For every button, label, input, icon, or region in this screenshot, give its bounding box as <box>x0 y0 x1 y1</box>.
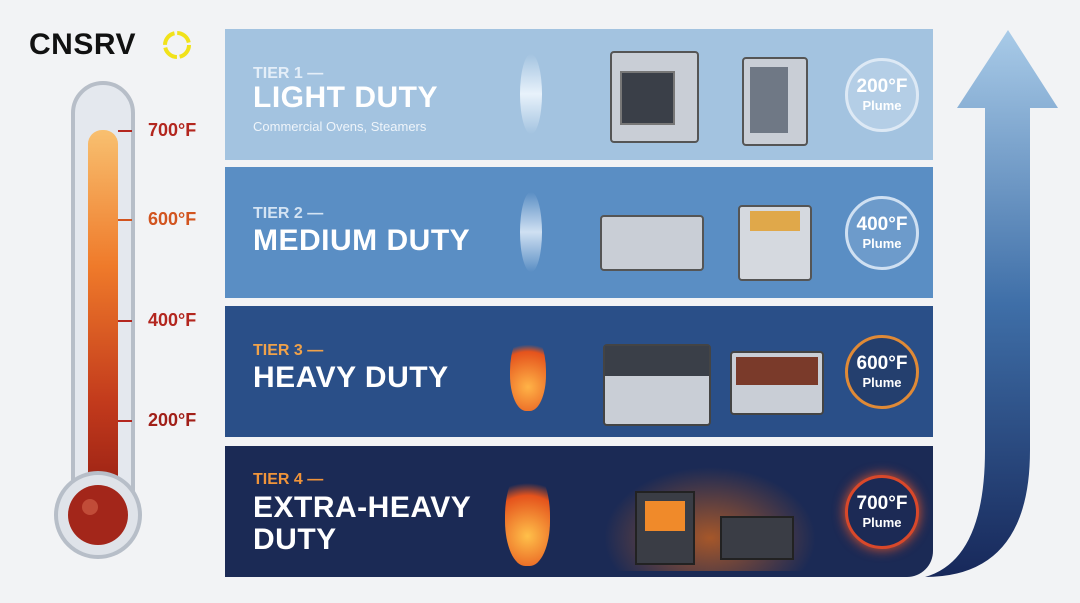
scale labels: 400°F <box>148 310 196 330</box>
badge: 400F: Plume <box>862 236 902 251</box>
thermometer <box>54 81 142 559</box>
panel: tier 4: EXTRA-HEAVY <box>253 491 471 524</box>
panel: tier 3: HEAVY DUTY <box>253 361 449 394</box>
badge: 200F: Plume <box>862 98 902 113</box>
panel: tier 1: LIGHT DUTY <box>253 81 438 114</box>
scale labels: 200°F <box>148 410 196 430</box>
badge: 400F: 400°F <box>857 214 907 235</box>
icon: combi steamer <box>742 57 808 146</box>
badge: 600F <box>845 335 919 409</box>
icon: range <box>603 344 711 426</box>
arrow <box>925 30 1058 577</box>
badge: 600F: Plume <box>862 375 902 390</box>
icon: logo ring <box>163 31 191 59</box>
panel: tier 1: Commercial Ovens, Steamers <box>253 119 426 134</box>
panel: tier 2 <box>225 167 933 298</box>
scale labels <box>118 120 196 430</box>
scale labels: 700°F <box>148 120 196 140</box>
panel: tier 3 <box>225 306 933 437</box>
icon: charbroiler <box>730 351 824 415</box>
badge: 700F: 700°F <box>857 493 907 514</box>
badge: 700F: Plume <box>862 515 902 530</box>
panel: tier 2: MEDIUM DUTY <box>253 224 470 257</box>
panel: tier 4: DUTY <box>253 523 337 556</box>
panel: tier 4: TIER 4 — <box>253 471 323 488</box>
panel: tier 1 <box>225 29 933 160</box>
icon: wood stove and fire pit <box>595 461 825 571</box>
icon: flame <box>510 331 546 411</box>
icon: griddle <box>600 215 704 271</box>
icon: oven <box>610 51 699 143</box>
panel: tier 3: TIER 3 — <box>253 342 323 359</box>
badge: 200F: 200°F <box>857 76 907 97</box>
scale labels: 600°F <box>148 209 196 229</box>
panel: tier 1: TIER 1 — <box>253 65 323 82</box>
badge: 200F <box>845 58 919 132</box>
logo: CNSRV <box>29 28 136 61</box>
icon: fryer <box>738 205 812 281</box>
badge: 400F <box>845 196 919 270</box>
panel: tier 4 <box>225 446 933 577</box>
icon: steam <box>520 54 542 134</box>
logo <box>29 28 191 61</box>
badge: 700F <box>845 475 919 549</box>
badge: 600F: 600°F <box>857 353 907 374</box>
panel: tier 2: TIER 2 — <box>253 205 323 222</box>
